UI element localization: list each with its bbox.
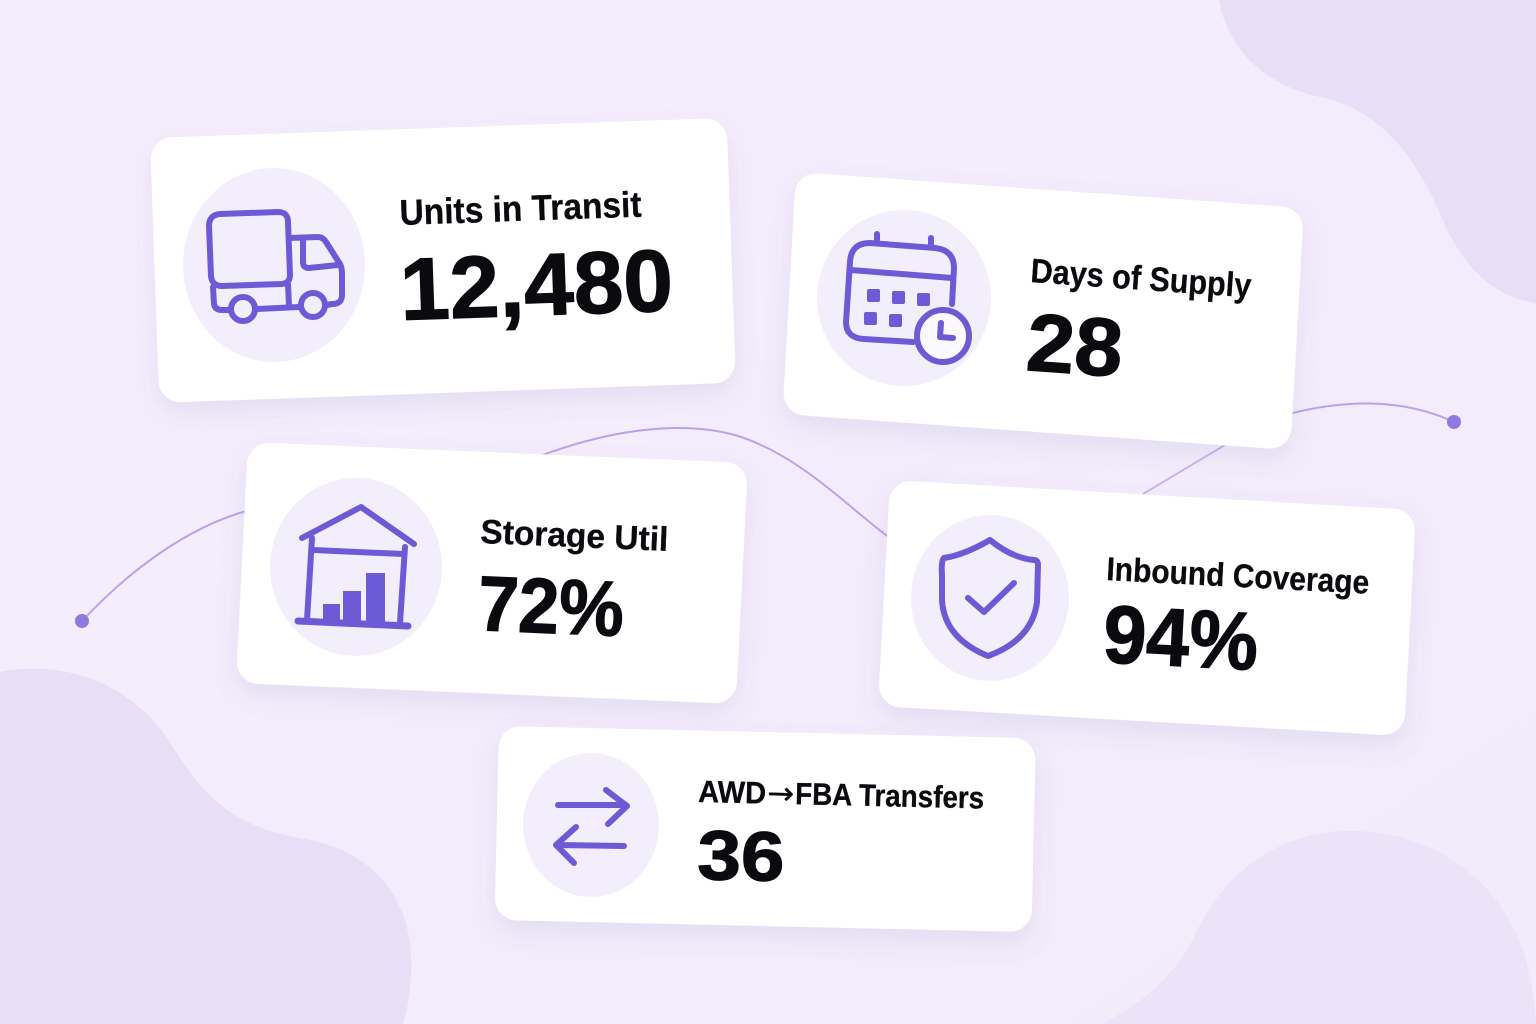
label: AWD bbox=[698, 774, 767, 811]
icon: calendar with clock bbox=[846, 234, 969, 362]
icon circle: truck bbox=[183, 168, 365, 362]
label: → bbox=[767, 776, 795, 812]
connector line: middle bbox=[540, 428, 890, 538]
icon circle: shield bbox=[911, 515, 1069, 681]
decorative blob: top right bbox=[1219, 0, 1536, 303]
value: 94% bbox=[1101, 589, 1261, 688]
label: FBA Transfers bbox=[795, 776, 985, 815]
value: 12,480 bbox=[398, 231, 674, 339]
label: Inbound Coverage bbox=[1106, 550, 1370, 601]
connector line: left bbox=[75, 510, 250, 628]
label: Storage Util bbox=[480, 513, 669, 559]
card: AWD to FBA Transfers bbox=[495, 726, 1036, 932]
icon circle: transfer bbox=[523, 753, 659, 897]
icon circle: warehouse bbox=[270, 478, 442, 656]
icon: transfer arrows bbox=[556, 790, 627, 863]
value: 28 bbox=[1024, 297, 1126, 395]
icon: warehouse bbox=[298, 507, 414, 626]
label: Days of Supply bbox=[1029, 252, 1253, 305]
card: Days of Supply bbox=[782, 172, 1304, 450]
value: 36 bbox=[697, 816, 785, 896]
decorative blob: bottom left bbox=[0, 669, 411, 1024]
label: Units in Transit bbox=[399, 184, 642, 233]
card: Storage Util bbox=[236, 442, 748, 704]
icon: shield bbox=[942, 540, 1038, 656]
card: Inbound Coverage bbox=[878, 480, 1416, 736]
card: Units in Transit bbox=[150, 118, 736, 403]
icon circle: calendar bbox=[817, 210, 991, 386]
decorative blob: bottom right bbox=[1103, 831, 1536, 1024]
connector line: right bbox=[1143, 403, 1461, 494]
icon: truck bbox=[209, 212, 342, 321]
value: 72% bbox=[476, 559, 626, 653]
